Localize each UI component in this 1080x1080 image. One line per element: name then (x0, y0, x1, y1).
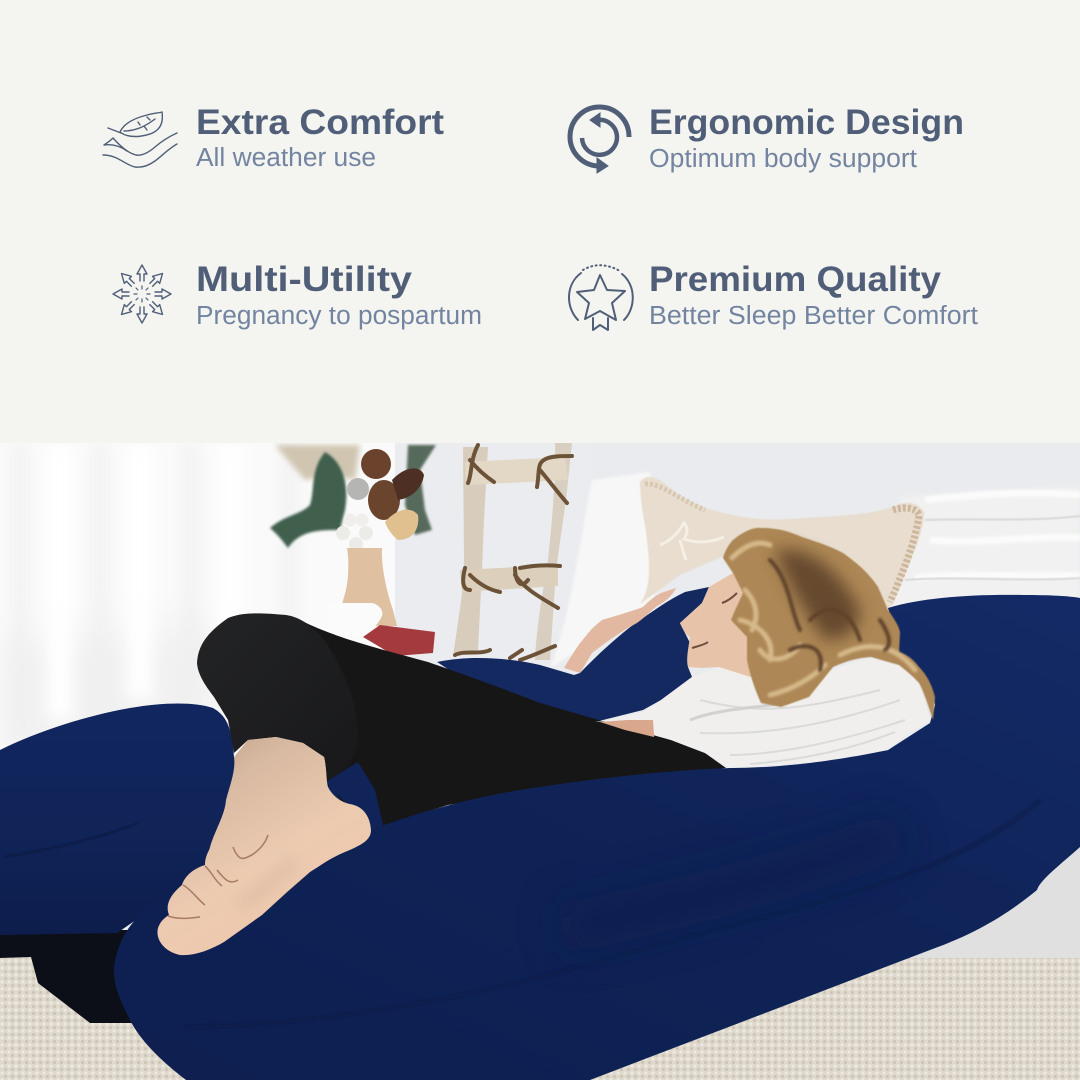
feature: Premium Quality (569, 260, 978, 330)
forearm (600, 720, 654, 737)
white sheet (900, 847, 1080, 958)
pillow seam (186, 800, 1040, 1027)
subheading: Better Sleep Better Comfort (649, 302, 978, 330)
room wall and curtain (0, 443, 1080, 930)
pillow shading (560, 830, 900, 930)
main navy pillow body (114, 595, 1080, 1080)
icon: star badge (569, 265, 633, 330)
carpet (0, 957, 1080, 1080)
book (363, 625, 435, 656)
icon: rotating arrows (570, 107, 629, 173)
background panel (0, 0, 1080, 443)
hair shadow (775, 549, 860, 640)
subheading: Pregnancy to pospartum (196, 302, 482, 330)
photo: woman resting on navy pregnancy pillow (0, 443, 1080, 1080)
icon: arrows radiating outward (113, 265, 171, 323)
birch ladder (453, 443, 572, 660)
flower arrangement (270, 445, 436, 551)
feature: Multi-Utility (113, 260, 482, 330)
vase (339, 548, 397, 626)
sleeve shadow (690, 704, 776, 722)
face and neck (680, 573, 752, 678)
subheading: Optimum body support (649, 145, 917, 173)
foot (157, 737, 371, 955)
white bedding behind pillow (550, 472, 1080, 668)
cushion seam (3, 823, 138, 857)
dark curls (770, 560, 889, 670)
dark shadow under pillow (0, 930, 132, 1024)
subheading: All weather use (196, 144, 376, 172)
feature: Ergonomic Design (570, 103, 964, 173)
cup (340, 603, 382, 626)
navy left cushion (0, 704, 342, 935)
knee and calf (197, 613, 338, 787)
navy behind foot (326, 762, 384, 830)
white sweater (596, 677, 889, 768)
toes (168, 835, 268, 918)
navy pillow upper arm (437, 587, 709, 722)
black leggings (197, 613, 726, 827)
feature: Extra Comfort (103, 103, 444, 172)
heading: Extra Comfort (196, 103, 444, 142)
wrinkled sole edge (247, 866, 289, 901)
hair highlights (732, 543, 915, 695)
hair (723, 528, 935, 720)
closed eye and lips (692, 593, 737, 648)
heading: Ergonomic Design (649, 103, 964, 142)
sweater ribbing (700, 690, 905, 764)
arm and hand (564, 588, 676, 673)
cream cushion (640, 477, 924, 620)
heading: Premium Quality (649, 260, 942, 299)
icon: feather on waves (103, 112, 177, 167)
heading: Multi-Utility (196, 260, 413, 299)
